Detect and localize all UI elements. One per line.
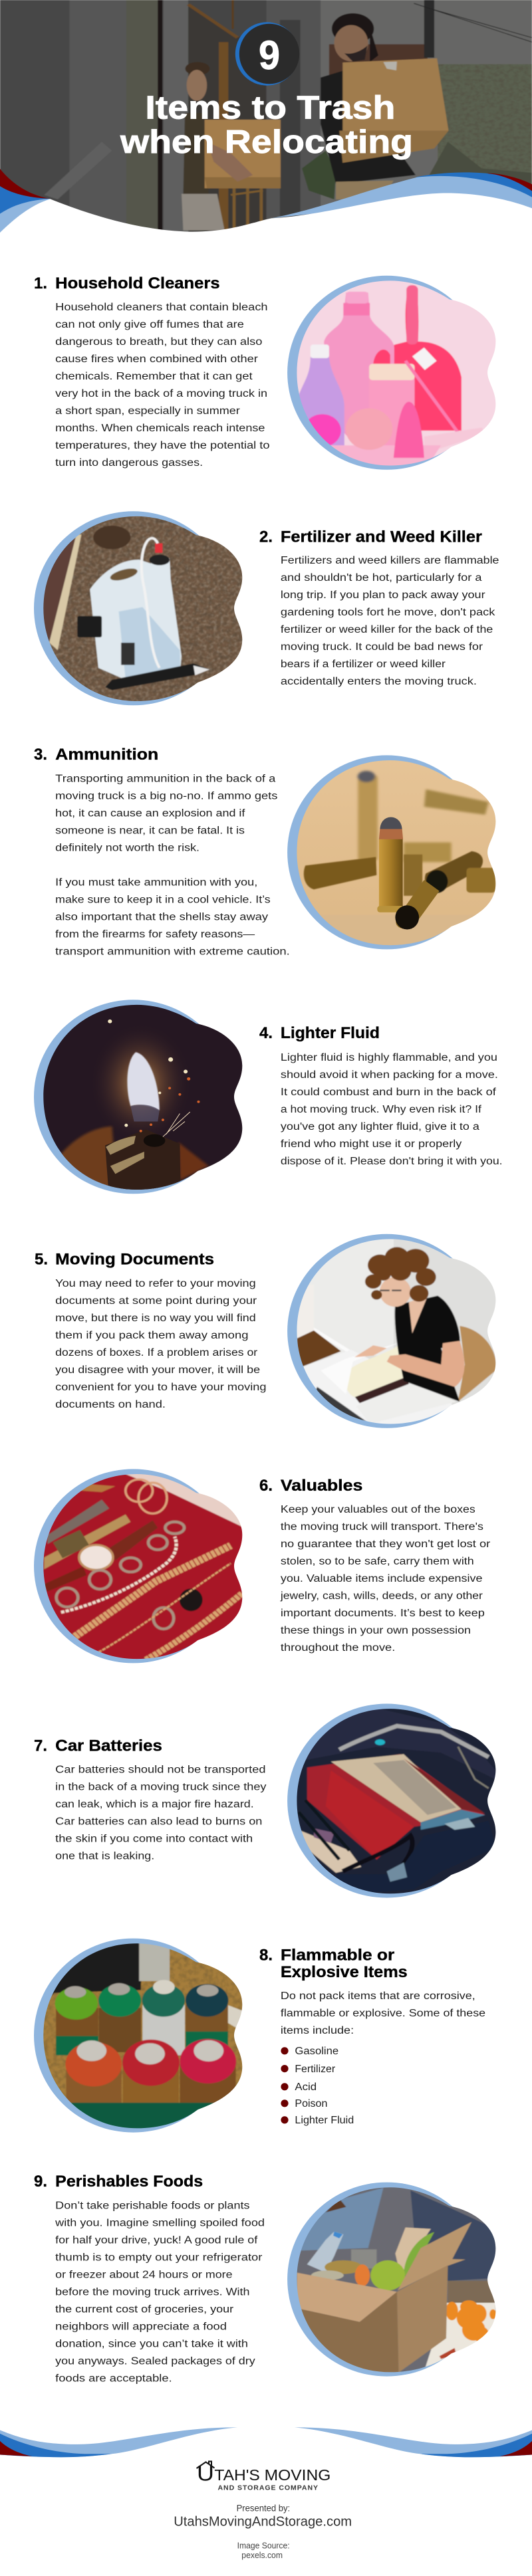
heading: Car Batteries bbox=[55, 1737, 162, 1755]
body text bbox=[55, 1765, 267, 1862]
body text: in the back of a moving truck since they bbox=[55, 1782, 267, 1793]
heading: Flammable or bbox=[281, 1947, 394, 1965]
body text: Car batteries should not be transported bbox=[55, 1765, 265, 1776]
heading: 2. bbox=[259, 528, 273, 546]
body text bbox=[280, 1504, 490, 1654]
man bbox=[332, 13, 374, 45]
heading: Explosive Items bbox=[281, 1963, 408, 1981]
heading: 6. bbox=[259, 1477, 273, 1495]
body text: from the firearms for safety reasons— bbox=[55, 928, 255, 940]
body text: throughout the move. bbox=[281, 1642, 395, 1654]
section 8: flammable or explosive items bbox=[34, 1933, 485, 2135]
title bbox=[120, 90, 413, 160]
body text: the skin if you come into contact with bbox=[55, 1834, 253, 1845]
title: when Relocating bbox=[120, 124, 413, 160]
body text: neighbors will appreciate a food bbox=[55, 2321, 227, 2333]
icon: house roof bbox=[197, 2462, 214, 2468]
photo: car engine bbox=[285, 1699, 502, 1901]
body text: a hot moving truck. Why even risk it? If bbox=[281, 1104, 482, 1115]
photo: cardboard box of food bbox=[285, 2179, 502, 2379]
heading: 7. bbox=[34, 1737, 47, 1755]
woman bbox=[186, 62, 209, 75]
body text: months. When chemicals reach intense bbox=[55, 423, 265, 434]
body text bbox=[55, 2200, 265, 2385]
bullet list: Fertilizer bbox=[295, 2064, 335, 2075]
body text: you. Valuable items include expensive bbox=[281, 1573, 483, 1584]
image source bbox=[237, 2541, 290, 2560]
right header wave bbox=[271, 172, 532, 218]
body text: very hot in the back of a moving truck in bbox=[55, 388, 267, 399]
body text: a short span, especially in summer bbox=[55, 405, 240, 417]
image source: Image Source: bbox=[237, 2541, 290, 2551]
heading: 3. bbox=[34, 746, 47, 764]
footer wave bbox=[0, 2427, 532, 2457]
body text: can not only give off fumes that are bbox=[55, 319, 244, 330]
body text: also important that the shells stay away bbox=[55, 911, 268, 922]
body text: temperatures, they have the potential to bbox=[55, 440, 270, 451]
bullet list: Poison bbox=[295, 2098, 327, 2109]
body text: stolen, so to be safe, carry them with bbox=[281, 1556, 474, 1567]
body text: convenient for you to have your moving bbox=[55, 1382, 266, 1393]
heading bbox=[259, 1947, 408, 1981]
heading: 9. bbox=[34, 2173, 47, 2191]
body text: them if you pack them away among bbox=[55, 1330, 248, 1341]
section 9: perishable foods bbox=[34, 2173, 502, 2385]
heading: 5. bbox=[35, 1250, 48, 1268]
body text: cause fires when combined with other bbox=[55, 354, 258, 365]
body text: bears if a fertilizer or weed killer bbox=[281, 659, 446, 670]
body text: definitely not worth the risk. bbox=[55, 842, 200, 853]
section 6: valuables bbox=[34, 1465, 490, 1667]
body text: you disagree with your mover, it will be bbox=[55, 1364, 260, 1376]
body text: can leak, which is a major fire hazard. bbox=[55, 1799, 254, 1810]
section 4: lighter fluid bbox=[34, 998, 503, 1201]
company logo bbox=[197, 2462, 331, 2492]
section 3: ammunition bbox=[34, 746, 502, 957]
title: Items to Trash bbox=[145, 90, 395, 126]
body text bbox=[281, 1990, 485, 2036]
body text: moving truck. It could be bad news for bbox=[281, 641, 483, 653]
body text: thumb is to empty out your refrigerator bbox=[55, 2252, 262, 2264]
body text bbox=[55, 1278, 266, 1410]
body text: transport ammunition with extreme caution. bbox=[55, 946, 290, 957]
bullet list: Acid bbox=[295, 2082, 317, 2093]
body text: dispose of it. Please don't bring it with you. bbox=[281, 1156, 503, 1167]
body text: donation, since you can’t take it with bbox=[55, 2339, 248, 2350]
body text: dozens of boxes. If a problem arises or bbox=[55, 1347, 257, 1358]
body text: Lighter fluid is highly flammable, and you bbox=[281, 1052, 497, 1063]
heading: Fertilizer and Weed Killer bbox=[281, 528, 482, 546]
photo: weed killer jug on soil bbox=[34, 508, 251, 710]
body text: dangerous to breath, but they can also bbox=[55, 336, 262, 348]
heading: Lighter Fluid bbox=[281, 1024, 380, 1042]
body text: fertilizer or weed killer for the back of the bbox=[281, 624, 493, 635]
website: UtahsMovingAndStorage.com bbox=[174, 2514, 352, 2529]
body text: long trip. If you plan to pack away your bbox=[281, 590, 485, 601]
body text: hot, it can cause an explosion and if bbox=[55, 807, 245, 819]
body text: with you. Imagine smelling spoiled food bbox=[55, 2218, 265, 2229]
header banner bbox=[0, 0, 532, 266]
company logo: TAH'S MOVING bbox=[214, 2466, 331, 2484]
company logo: U bbox=[197, 2462, 214, 2486]
body text: Keep your valuables out of the boxes bbox=[281, 1504, 475, 1515]
body text bbox=[55, 773, 290, 957]
body text: accidentally enters the moving truck. bbox=[281, 676, 477, 687]
body text: important documents. It’s best to keep bbox=[281, 1608, 485, 1619]
white wave cut-out bbox=[0, 193, 532, 266]
body text: someone is near, it can be fatal. It is bbox=[55, 825, 245, 836]
body text: you've got any lighter fluid, give it to a bbox=[281, 1121, 479, 1132]
body text: gardening tools fort he move, don't pack bbox=[281, 607, 495, 618]
body text: for half your drive, yuck! A good rule of bbox=[55, 2235, 258, 2246]
body text: Do not pack items that are corrosive, bbox=[281, 1990, 475, 2002]
section 7: car batteries bbox=[34, 1699, 502, 1901]
section 5: moving documents bbox=[35, 1231, 502, 1433]
body text: Transporting ammunition in the back of a bbox=[55, 773, 276, 784]
body text: the moving truck will transport. There's bbox=[281, 1521, 483, 1533]
body text: turn into dangerous gasses. bbox=[55, 457, 203, 469]
body text: jewelry, cash, wills, deeds, or any other bbox=[280, 1590, 483, 1602]
bullet list: Lighter Fluid bbox=[295, 2115, 354, 2126]
body text: or freezer about 24 hours or more bbox=[55, 2270, 232, 2281]
heading: 4. bbox=[259, 1024, 273, 1042]
photo: spray paint cans bbox=[34, 1933, 251, 2135]
body text: you anyways. Sealed packages of dry bbox=[55, 2356, 255, 2367]
heading: 8. bbox=[259, 1947, 273, 1965]
body text: friend who might use it or properly bbox=[281, 1138, 462, 1150]
body text: items include: bbox=[281, 2025, 354, 2036]
image source: pexels.com bbox=[241, 2551, 283, 2560]
heading: Moving Documents bbox=[55, 1250, 214, 1268]
heading: Ammunition bbox=[55, 746, 158, 764]
body text: one that is leaking. bbox=[55, 1851, 154, 1862]
body text bbox=[281, 555, 499, 687]
heading: Valuables bbox=[281, 1477, 362, 1495]
body text: Car batteries can also lead to burns on bbox=[55, 1816, 262, 1828]
body text: Don’t take perishable foods or plants bbox=[55, 2200, 250, 2212]
section 2: fertilizer and weed killer bbox=[34, 508, 499, 710]
body text bbox=[55, 302, 270, 469]
body text: chemicals. Remember that it can get bbox=[55, 371, 253, 382]
photo: lighter flame bbox=[34, 998, 251, 1201]
body text: It could combust and burn in the back of bbox=[281, 1087, 497, 1098]
body text: before the moving truck arrives. With bbox=[55, 2287, 249, 2298]
body text: flammable or explosive. Some of these bbox=[281, 2008, 485, 2019]
company logo: AND STORAGE COMPANY bbox=[218, 2484, 318, 2492]
photo: woman reading documents bbox=[285, 1231, 502, 1433]
body text: Fertilizers and weed killers are flammable bbox=[281, 555, 499, 566]
section 1: household cleaners bbox=[34, 273, 502, 475]
body text bbox=[281, 1052, 503, 1167]
bullet list: Gasoline bbox=[295, 2046, 338, 2057]
body text: You may need to refer to your moving bbox=[55, 1278, 256, 1289]
number badge: 9 bbox=[259, 33, 280, 78]
body text: Household cleaners that contain bleach bbox=[55, 302, 268, 313]
body text: make sure to keep it in a cool vehicle. It’s bbox=[55, 894, 271, 905]
body text: documents at some point during your bbox=[55, 1295, 257, 1307]
bullet list bbox=[281, 2046, 354, 2126]
presented by: Presented by: bbox=[237, 2503, 290, 2514]
body text: foods are acceptable. bbox=[55, 2373, 172, 2385]
body text: the current cost of groceries, your bbox=[55, 2304, 233, 2315]
left header wave bbox=[0, 169, 51, 235]
body text: moving truck is a big no-no. If ammo gets bbox=[55, 790, 278, 802]
photo: pink cleaning products bbox=[285, 273, 502, 475]
header photo: movers carrying boxes bbox=[0, 0, 532, 235]
body text: If you must take ammunition with you, bbox=[55, 877, 257, 888]
body text: documents on hand. bbox=[55, 1399, 166, 1410]
body text: these things in your own possession bbox=[281, 1625, 471, 1636]
body text: no guarantee that they won't get lost or bbox=[281, 1539, 490, 1550]
body text: and shouldn't be hot, particularly for a bbox=[281, 572, 482, 584]
heading: Household Cleaners bbox=[55, 274, 220, 292]
number badge bbox=[235, 22, 299, 86]
heading: 1. bbox=[34, 274, 47, 292]
photo: bullets on a wooden table bbox=[285, 753, 502, 956]
body text: move, but there is no way you will find bbox=[55, 1313, 256, 1324]
body text: should avoid it when packing for a move. bbox=[281, 1069, 498, 1081]
heading: Perishables Foods bbox=[55, 2173, 203, 2191]
photo: jewelry on red velvet bbox=[34, 1465, 251, 1667]
